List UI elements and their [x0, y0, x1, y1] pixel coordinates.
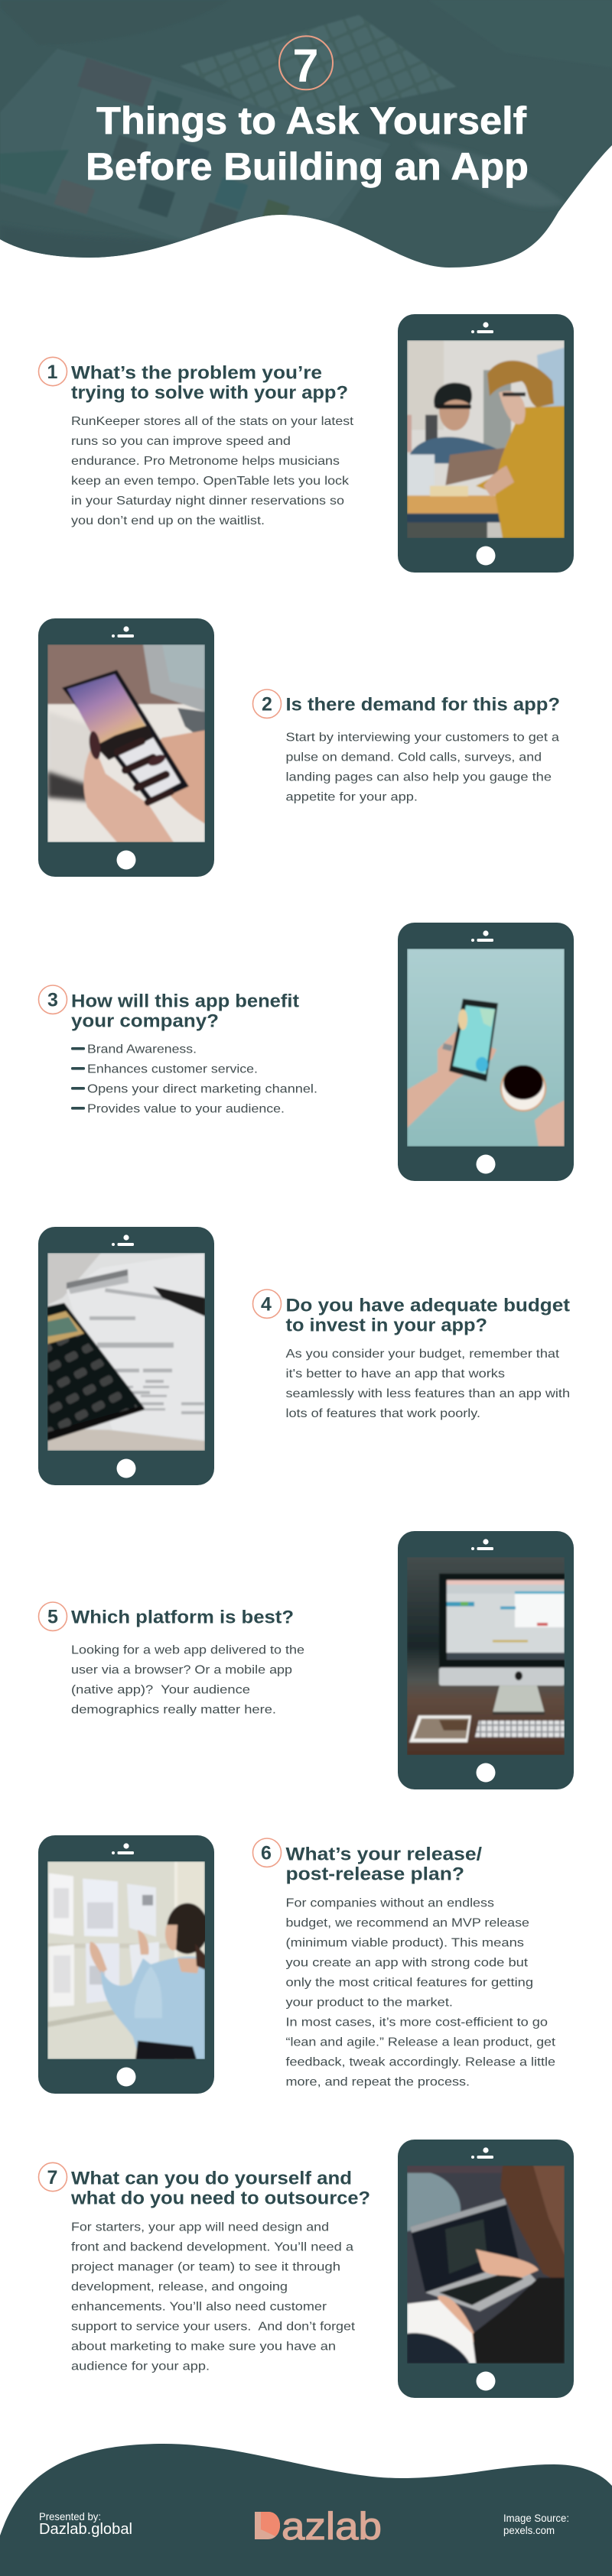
body text 7: For starters, your app will need design and	[71, 2221, 329, 2234]
footer credit: image source: pexels.com	[503, 2524, 555, 2536]
body text 6: more, and repeat the process.	[286, 2075, 470, 2088]
number badge 7	[38, 2162, 67, 2192]
heading 4: Do you have adequate budget	[286, 1296, 570, 1316]
heading 7: What can you do yourself and	[71, 2169, 352, 2189]
body text 2: appetite for your app.	[286, 790, 418, 803]
number badge 2	[252, 689, 282, 718]
body text 5: (native app)? Your audience	[71, 1683, 250, 1696]
body text 1: you don’t end up on the waitlist.	[71, 514, 265, 527]
title: Before Building an App	[86, 145, 529, 188]
body text 7: enhancements. You’ll also need customer	[71, 2300, 327, 2313]
number badge 7: 7	[47, 2167, 57, 2188]
heading 6: post-release plan?	[286, 1864, 464, 1884]
body text 2	[286, 731, 559, 803]
number badge 4	[252, 1290, 282, 1318]
heading 3: How will this app benefit	[71, 991, 299, 1011]
number badge 1: 1	[47, 362, 58, 383]
heading 7	[70, 2169, 370, 2209]
number badge 3: 3	[47, 990, 58, 1011]
bullet list: Provides value to your audience.	[87, 1103, 285, 1116]
heading 6	[286, 1844, 482, 1884]
body text 7: development, release, and ongoing	[71, 2280, 288, 2293]
number badge 5	[38, 1602, 67, 1630]
body text 1: endurance. Pro Metronome helps musicians	[71, 455, 340, 468]
body text 6: “lean and agile.” Release a lean product, get	[286, 2036, 556, 2049]
bullet list	[71, 1043, 317, 1116]
footer credit: image source	[503, 2512, 569, 2536]
body text 6: (minimum viable product). This means	[286, 1936, 524, 1949]
body text 5: Looking for a web app delivered to the	[71, 1643, 304, 1656]
body text 6	[286, 1896, 556, 2088]
body text 4	[286, 1348, 570, 1420]
phone with photo: desktop computer	[398, 1531, 574, 1789]
body text 7: front and backend development. You’ll need a	[71, 2240, 353, 2253]
phone with photo: phone and coffee cup	[398, 923, 574, 1181]
phone with photo: two colleagues with tablet	[398, 314, 574, 573]
body text 7: project manager (or team) to see it through	[71, 2260, 340, 2273]
number badge 1	[38, 357, 67, 386]
heading 1	[71, 363, 348, 404]
body text 1	[71, 415, 354, 527]
heading 5: Which platform is best?	[71, 1607, 294, 1627]
body text 5	[71, 1643, 304, 1716]
number badge 5: 5	[47, 1607, 58, 1628]
heading 6: What’s your release/	[286, 1844, 482, 1864]
body text 2: Start by interviewing your customers to get a	[286, 731, 559, 744]
body text 6: For companies without an endless	[286, 1896, 494, 1909]
bullet list: Brand Awareness.	[87, 1043, 197, 1056]
body text 6: you create an app with strong code but	[286, 1956, 529, 1969]
body text 7	[71, 2221, 356, 2373]
body text 6: your product to the market.	[286, 1996, 453, 2009]
body text 5: demographics really matter here.	[71, 1703, 276, 1716]
body text 4: As you consider your budget, remember that	[286, 1348, 560, 1361]
number badge 6: 6	[261, 1843, 272, 1864]
body text 4: seamlessly with less features than an app with	[286, 1387, 570, 1400]
heading 4	[286, 1296, 570, 1336]
footer credit: image source: Image Source:	[503, 2512, 569, 2524]
number badge 3	[38, 985, 67, 1014]
body text 4: it's better to have an app that works	[286, 1367, 505, 1380]
phone with photo: laptop showing code	[398, 2140, 574, 2398]
panel: step 6	[38, 1835, 556, 2094]
body text 1: keep an even tempo. OpenTable lets you lock	[71, 475, 350, 488]
heading 2: Is there demand for this app?	[286, 694, 560, 715]
panel: step 4	[38, 1227, 570, 1485]
title	[86, 99, 529, 188]
panel: step 5	[38, 1531, 574, 1789]
heading 1: trying to solve with your app?	[71, 383, 348, 404]
body text 7: support to service your users. And don’t forget	[71, 2320, 356, 2333]
panel: step 7	[38, 2140, 574, 2398]
heading 1: What’s the problem you’re	[71, 363, 322, 384]
footer banner	[0, 2444, 612, 2576]
number badge 4: 4	[261, 1294, 272, 1316]
body text 6: budget, we recommend an MVP release	[286, 1916, 529, 1929]
body text 1: in your Saturday night dinner reservations so	[71, 495, 344, 508]
body text 1: runs so you can improve speed and	[71, 435, 291, 448]
logo: Dazlab: azlab	[282, 2505, 382, 2548]
panel: step 2	[38, 618, 560, 877]
header badge: 7: 7	[293, 40, 318, 92]
body text 7: audience for your app.	[71, 2360, 210, 2373]
heading 7: what do you need to outsource?	[70, 2188, 370, 2209]
body text 6: only the most critical features for getting	[286, 1976, 533, 1989]
phone with photo: woman pinning papers to a wall	[38, 1835, 214, 2094]
body text 1: RunKeeper stores all of the stats on your latest	[71, 415, 354, 428]
heading 3: your company?	[71, 1011, 219, 1031]
body text 5: user via a browser? Or a mobile app	[71, 1663, 292, 1676]
body text 2: landing pages can also help you gauge the	[286, 771, 552, 784]
body text 7: about marketing to make sure you have an	[71, 2340, 336, 2353]
body text 6: feedback, tweak accordingly. Release a little	[286, 2055, 555, 2068]
footer credit: presented by: Presented by:	[39, 2510, 101, 2522]
bullet list: Enhances customer service.	[87, 1063, 258, 1076]
body text 4: lots of features that work poorly.	[286, 1407, 480, 1420]
heading 4: to invest in your app?	[286, 1316, 487, 1336]
phone with photo: hands holding smartphone	[38, 618, 214, 877]
body text 2: pulse on demand. Cold calls, surveys, and	[286, 751, 542, 764]
panel: step 1	[38, 314, 574, 573]
heading 3	[71, 991, 299, 1031]
panel: step 3	[38, 923, 574, 1181]
bullet list: Opens your direct marketing channel.	[87, 1083, 317, 1096]
title: Things to Ask Yourself	[96, 99, 526, 142]
number badge 6	[252, 1838, 282, 1867]
body text 6: In most cases, it’s more cost-efficient to go	[286, 2016, 548, 2029]
header badge: 7	[279, 36, 333, 92]
header banner	[0, 0, 612, 275]
number badge 2: 2	[262, 694, 272, 715]
phone with photo: calculator and pen	[38, 1227, 214, 1485]
footer credit: presented by: Dazlab.global	[39, 2521, 132, 2538]
footer credit: presented by	[39, 2510, 132, 2538]
